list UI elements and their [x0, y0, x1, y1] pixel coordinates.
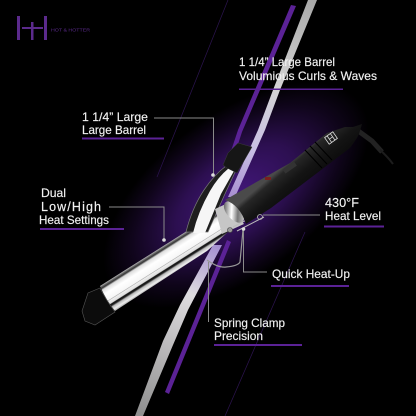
red light — [265, 177, 271, 180]
handle logo — [325, 132, 337, 144]
switch — [283, 162, 297, 174]
callout: 1 1/4 large barrel — [82, 110, 215, 177]
barrel — [100, 213, 228, 311]
callout: spring clamp: Precision — [214, 329, 263, 343]
curling iron — [82, 124, 393, 325]
callout: 1 1/4 large barrel: Large Barrel — [82, 123, 146, 137]
callout: dual heat: Dual — [41, 186, 66, 200]
callout: heat level — [263, 195, 384, 228]
power cord — [357, 130, 382, 152]
spring loop — [207, 230, 243, 267]
callout: dual heat: Heat Settings — [39, 213, 109, 227]
small ring — [258, 214, 262, 220]
callout: heat level: Heat Level — [325, 209, 381, 223]
callout: dual heat — [39, 186, 166, 242]
handle — [225, 124, 362, 224]
clamp hardware — [233, 212, 264, 231]
clamp outer edge — [186, 166, 236, 232]
logo — [17, 16, 90, 40]
callout: 1 1/4 large barrel: 1 1/4” Large — [82, 110, 148, 124]
logo: HOT & HOTTER — [51, 28, 90, 32]
hardware screw — [228, 228, 232, 232]
power cord thin — [380, 150, 393, 164]
faint diagonal lines — [157, 0, 305, 416]
silver diagonal stripe — [135, 0, 317, 416]
handle mouth chrome — [220, 198, 248, 226]
callout: heat level: 430°F — [325, 195, 359, 210]
callout: spring clamp — [208, 262, 302, 346]
callout: quick heat-up: Quick Heat-Up — [272, 267, 350, 281]
tip — [82, 288, 115, 325]
callout: voluminous curls — [239, 55, 377, 90]
clamp lever — [223, 143, 252, 173]
callout: dual heat: Low/High — [41, 200, 101, 214]
callout: voluminous curls: 1 1/4” Large Barrel — [239, 55, 335, 69]
purple glow behind iron — [64, 38, 408, 352]
handle ribs — [305, 142, 332, 168]
callout: spring clamp: Spring Clamp — [214, 316, 285, 330]
purple diagonal stripe — [165, 5, 296, 394]
collar — [215, 203, 244, 234]
callout: quick heat-up — [242, 227, 350, 287]
callout: voluminous curls: Volumious Curls & Waves — [239, 69, 377, 83]
clamp chrome — [193, 168, 234, 233]
